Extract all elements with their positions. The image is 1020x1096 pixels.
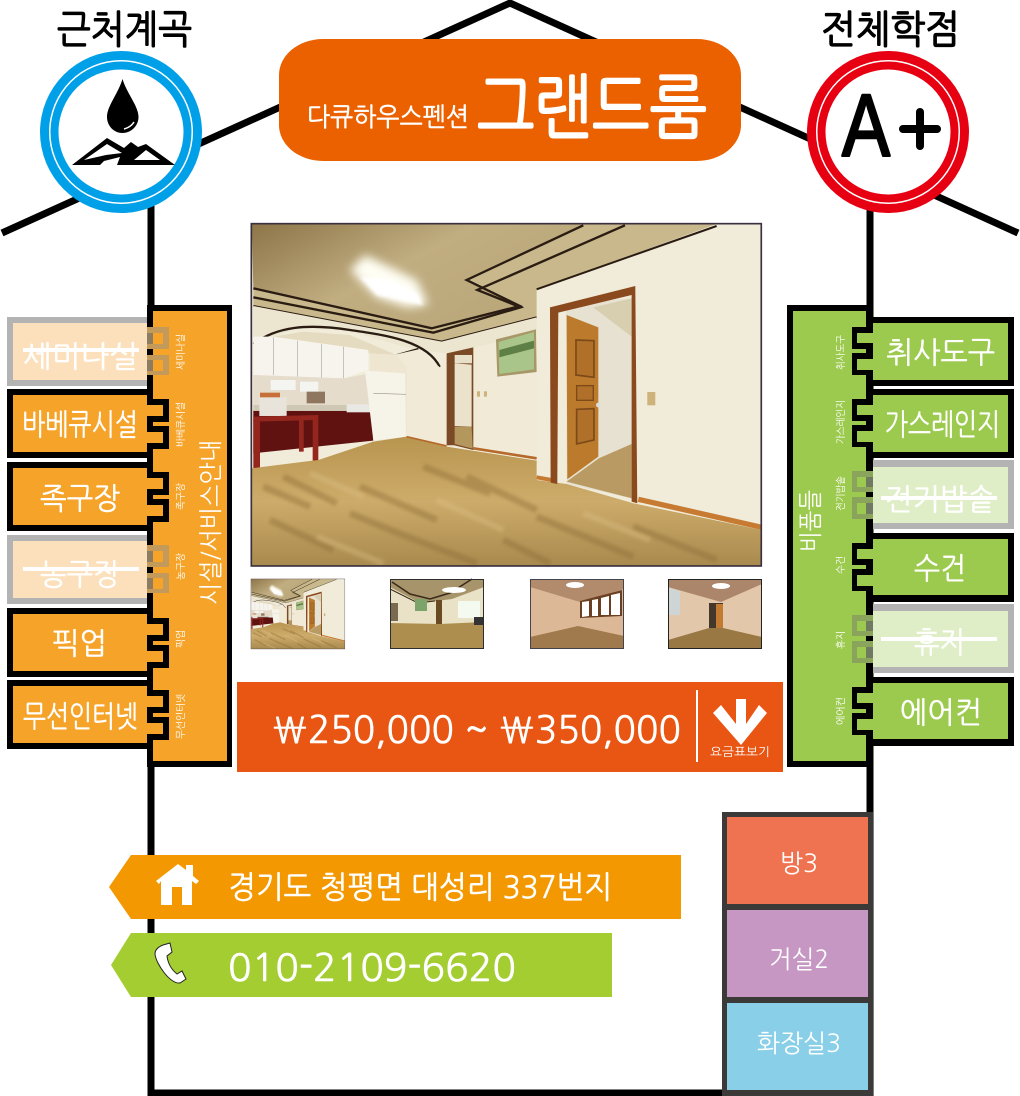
tab: seminar room (unavailable): 세미나실 <box>23 342 138 372</box>
room: bedrooms <box>727 817 868 904</box>
panel: amenities: 수건 <box>835 556 846 574</box>
badge: A+ grade: A <box>842 76 890 175</box>
tab: basketball court (unavailable): 농구장 <box>40 560 120 590</box>
phone banner: 010-2109-6620 <box>228 949 516 987</box>
tab: basketball court (unavailable) <box>7 535 169 604</box>
tab: pickup <box>7 608 169 677</box>
phone banner <box>111 933 612 997</box>
panel: amenities: 휴지 <box>835 631 846 649</box>
badge: A+ grade <box>807 51 969 213</box>
room: living rooms <box>727 910 868 997</box>
tab: tissue (unavailable): 휴지 <box>914 628 965 658</box>
room: bedrooms: 방3 <box>780 851 818 876</box>
address banner <box>109 855 681 919</box>
tab: air conditioner <box>852 677 1014 746</box>
panel: amenities: 취사도구 <box>835 334 846 370</box>
tab: gas range <box>852 389 1014 458</box>
thumbnail 3 <box>530 579 624 649</box>
panel: amenities: 가스레인지 <box>835 400 846 444</box>
pension name: 다큐하우스펜션 <box>307 104 469 130</box>
panel: facilities: 바베큐시설 <box>175 402 186 447</box>
price bar: 요금표보기 <box>710 746 770 758</box>
panel: facilities: 족구장 <box>175 482 186 510</box>
panel: amenities <box>787 305 873 767</box>
panel: amenities: 에어컨 <box>835 697 846 725</box>
tab: rice cooker (unavailable): 전기밥솥 <box>885 484 995 515</box>
tab: tissue (unavailable) <box>852 604 1014 673</box>
room name: 그랜드룸 <box>477 73 707 143</box>
tab: rice cooker (unavailable) <box>852 460 1014 529</box>
panel: amenities: 비품들 <box>799 490 823 552</box>
heading: nearby valley: 근처계곡 <box>57 10 192 49</box>
panel: amenities: 전기밥솥 <box>835 475 846 511</box>
main photo <box>251 224 762 566</box>
price bar <box>237 682 783 772</box>
tab: seminar room (unavailable) <box>7 317 169 386</box>
room: living rooms: 거실2 <box>769 947 829 972</box>
tab: barbecue <box>7 389 169 458</box>
icon: down arrow <box>713 699 767 745</box>
tab: cookware <box>852 317 1014 386</box>
price bar: ₩250,000 ~ ₩350,000 <box>272 711 681 749</box>
room: bathrooms <box>727 1003 868 1090</box>
address banner: 경기도 청평면 대성리 337번지 <box>228 872 612 903</box>
tab: barbecue: 바베큐시설 <box>22 410 138 440</box>
title pill <box>279 39 741 161</box>
thumbnail 4 <box>668 579 762 649</box>
tab: wireless internet: 무선인터넷 <box>23 702 138 732</box>
icon: phone <box>155 943 186 983</box>
tab: wireless internet <box>7 680 169 749</box>
tab: air conditioner: 에어컨 <box>900 698 982 728</box>
room counts <box>722 812 873 1096</box>
tab: jokgu court: 족구장 <box>40 484 120 514</box>
panel: facilities: 시설/서비스안내 <box>199 440 223 605</box>
thumbnail 2 <box>390 579 484 649</box>
heading: overall grade: 전체학점 <box>821 10 960 49</box>
thumbnail 1 <box>251 579 345 649</box>
panel: facilities <box>147 305 232 767</box>
panel: facilities: 농구장 <box>175 552 186 580</box>
room: bathrooms: 화장실3 <box>757 1031 841 1056</box>
panel: facilities: 세미나실 <box>175 334 186 370</box>
tab: jokgu court <box>7 462 169 531</box>
tab: towels <box>852 533 1014 602</box>
icon: house <box>156 864 199 905</box>
badge: valley icon <box>40 51 202 213</box>
tab: cookware: 취사도구 <box>886 338 995 368</box>
tab: pickup: 픽업 <box>52 629 107 659</box>
panel: facilities: 무선인터넷 <box>175 694 186 739</box>
panel: facilities: 픽업 <box>175 630 186 648</box>
tab: towels: 수건 <box>914 554 966 584</box>
